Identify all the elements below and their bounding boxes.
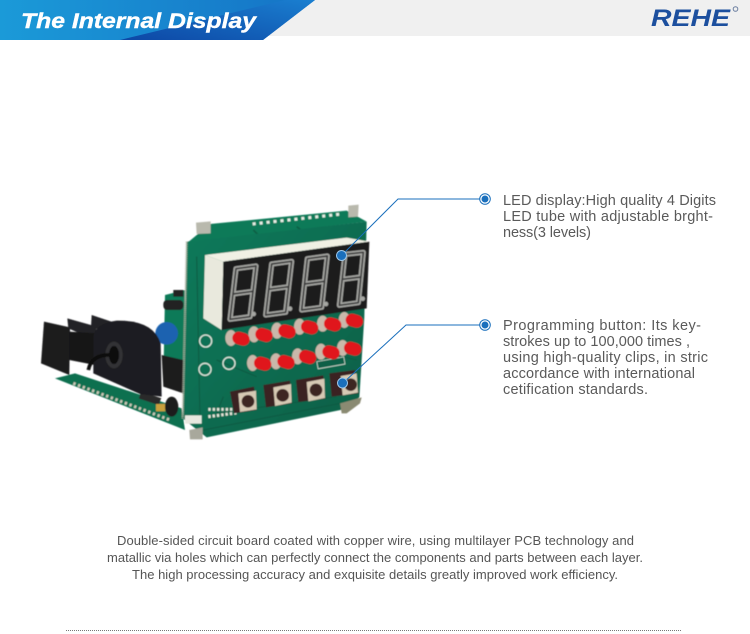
callout: LED display leader line — [336, 194, 490, 260]
digit 2 — [266, 261, 292, 315]
text: programming button description: accordance with international — [503, 366, 695, 382]
text: programming button description: cetification standards. — [503, 382, 648, 398]
tact buttons — [230, 370, 358, 413]
digit 4 — [339, 252, 363, 305]
product photo: circuit board — [41, 205, 369, 439]
text: LED display description — [503, 193, 716, 241]
title: The Internal Display — [21, 9, 257, 33]
rear board — [187, 205, 367, 243]
red LED indicators — [225, 312, 357, 371]
current transformer and clamps — [41, 315, 162, 397]
text: LED display description: LED display:High quality 4 Digits — [503, 193, 716, 209]
digit 3 — [302, 256, 327, 310]
text: bottom summary: Double-sided circuit board coated with copper wire, using multilayer PCB technology and — [117, 533, 634, 548]
header: blue title banner — [0, 0, 315, 40]
bottom board — [55, 373, 185, 430]
text: programming button description — [503, 318, 708, 398]
logo: REHE: REHE — [651, 5, 731, 32]
LED display module — [203, 238, 369, 330]
text: LED display description: ness(3 levels) — [503, 225, 591, 241]
rear vertical board with parts — [155, 290, 185, 393]
text: programming button description: strokes up to 100,000 times , — [503, 334, 690, 350]
text: bottom summary — [107, 533, 643, 582]
text: programming button description: Programming button: Its key- — [503, 318, 701, 334]
text: programming button description: using high-quality clips, in stric — [503, 350, 708, 366]
main board — [183, 222, 367, 439]
header: grey bar — [0, 0, 750, 36]
callout: programming button leader line — [338, 320, 490, 388]
digit 1 — [230, 266, 256, 319]
text: bottom summary: matallic via holes which can perfectly connect the components and parts between each layer. — [107, 550, 643, 565]
text: LED display description: LED tube with adjustable brght- — [503, 209, 713, 225]
text: bottom summary: The high processing accuracy and exquisite details greatly improved work efficiency. — [132, 567, 618, 582]
